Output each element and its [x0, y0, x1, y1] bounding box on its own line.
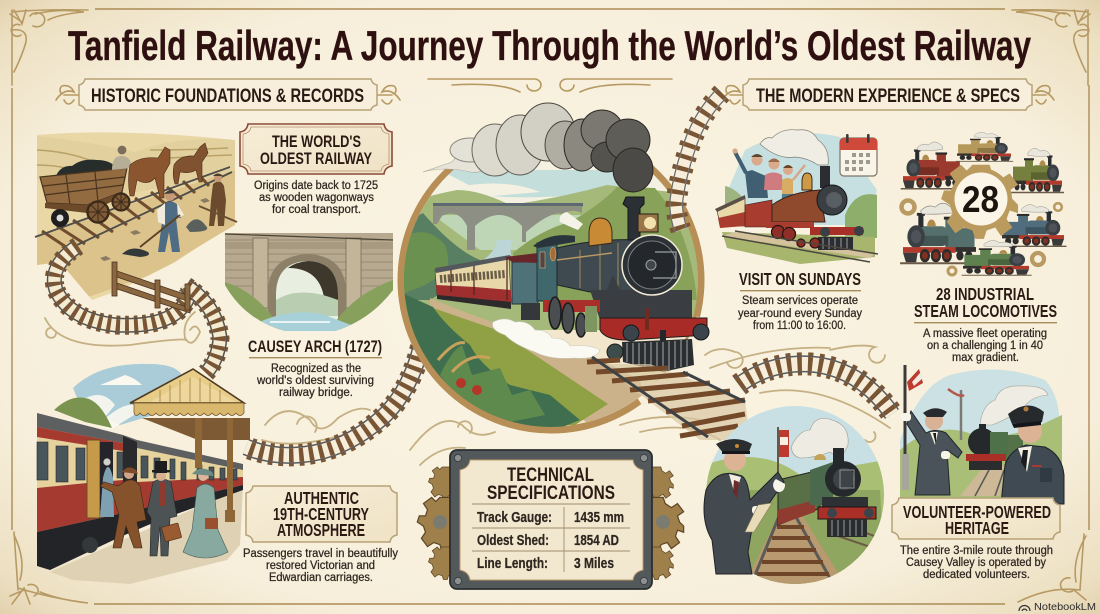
straight wooden track	[35, 167, 232, 253]
distant hills	[400, 185, 700, 330]
railway carriage	[37, 427, 243, 532]
red locomotive	[901, 142, 962, 189]
text: Causey Arch description: world's oldest surviving	[256, 375, 374, 387]
trees left	[404, 232, 448, 293]
illustration: fleet of 28 locomotives	[900, 132, 1066, 275]
boiler	[557, 240, 645, 292]
wagon wheels	[51, 209, 69, 227]
text: world's oldest railway description: for coal transport.	[272, 204, 361, 216]
hills	[725, 186, 745, 225]
dome	[589, 218, 612, 246]
gears	[417, 467, 684, 580]
small gears	[902, 200, 1062, 275]
text: locomotives description: A massive fleet operating	[923, 328, 1047, 340]
carriage windows	[37, 442, 237, 482]
white steam	[492, 319, 600, 358]
table rows: 3 Miles	[574, 556, 614, 572]
technical specifications panel: SPECIFICATIONS	[487, 483, 615, 504]
plaque: authentic atmosphere	[246, 486, 397, 542]
illustration: Causey Arch bridge	[225, 233, 393, 333]
heading banner: modern experience: THE MODERN EXPERIENCE & SPECS	[756, 85, 1020, 107]
break in ring at lower right	[640, 318, 702, 402]
tender	[512, 262, 538, 304]
heading banner: modern experience	[722, 79, 1054, 110]
table rows: 1435 mm	[574, 510, 624, 526]
lamp	[638, 214, 658, 232]
text: visit on Sundays description: year-round every Sunday	[738, 308, 862, 320]
carriage	[717, 197, 745, 226]
signal post and arm	[904, 365, 906, 489]
horse one	[128, 147, 170, 198]
viaduct	[433, 203, 583, 250]
track curving down from medallion	[246, 347, 421, 455]
table rows	[477, 510, 624, 572]
heading: visit on Sundays	[739, 269, 861, 291]
open door and passenger boarding	[87, 440, 100, 518]
carriages	[435, 257, 511, 302]
text: authentic atmosphere description: restored Victorian and	[266, 560, 375, 572]
passengers waving	[732, 148, 805, 217]
sky and hills	[900, 370, 1060, 500]
text: locomotives description	[923, 328, 1047, 364]
gold ring	[401, 130, 701, 430]
olive locomotive	[1011, 148, 1064, 192]
hills and dirt ground	[37, 130, 238, 305]
central gear with 28	[941, 165, 1018, 239]
train smoke	[760, 130, 828, 165]
plaque: world's oldest railway: OLDEST RAILWAY	[260, 150, 372, 168]
heading: 28 locomotives	[914, 284, 1057, 323]
valley hillsides	[400, 213, 480, 300]
text: world's oldest railway description: as wooden wagonways	[259, 192, 374, 204]
plaque: volunteer-powered heritage: HERITAGE	[945, 518, 1009, 538]
scene: horse-drawn coal wagon on wooden wagonway	[35, 130, 238, 305]
text: world's oldest railway description: Origins date back to 1725	[254, 180, 378, 192]
text: authentic atmosphere description: Edwardian carriages.	[269, 572, 373, 584]
guard in uniform	[704, 439, 785, 574]
flourishes near tracks	[45, 312, 890, 465]
corner ornament: bottom right	[1018, 534, 1086, 602]
corner ornament: bottom left	[10, 532, 88, 604]
canopy posts	[195, 418, 202, 468]
wooden wagon	[40, 168, 127, 205]
passenger in teal dress	[183, 484, 228, 558]
text: volunteer description: The entire 3-mile route through	[900, 545, 1053, 557]
text: Causey Arch description: railway bridge.	[279, 387, 353, 399]
heading: visit on Sundays: VISIT ON SUNDAYS	[739, 269, 861, 289]
wagon driver	[112, 156, 132, 170]
track in front of locomotive	[587, 357, 750, 440]
station canopy	[130, 369, 244, 403]
corner ornament: top right	[1012, 10, 1090, 85]
text: locomotives description: on a challenging 1 in 40	[927, 340, 1043, 352]
illustration: family riding steam train on Sunday	[715, 130, 878, 264]
trackbed and grass	[430, 298, 650, 430]
wooden fence	[112, 262, 190, 313]
flourish above central medallion	[428, 79, 672, 92]
green coach	[778, 470, 820, 525]
corner ornament: top left	[10, 10, 88, 85]
worker with shovel	[158, 202, 181, 252]
smoke plume	[423, 103, 653, 192]
curved track below wagon scene	[54, 246, 220, 373]
table rows: Track Gauge:	[477, 510, 552, 526]
volunteer one	[901, 408, 962, 495]
text: locomotives description: max gradient.	[952, 352, 1019, 364]
text: volunteer description: dedicated volunteers.	[923, 569, 1030, 581]
heading: Causey Arch	[248, 337, 382, 358]
passenger in top hat	[147, 479, 177, 556]
text: authentic atmosphere description	[243, 548, 398, 584]
passenger in brown suit	[100, 480, 146, 548]
central gear with 28: 28	[962, 179, 999, 220]
plaque: world's oldest railway: THE WORLD'S	[272, 133, 361, 151]
track top right of medallion	[676, 93, 722, 230]
foreground foliage	[400, 292, 580, 436]
green locomotive	[962, 240, 1032, 275]
illustration: volunteers beside signal	[900, 365, 1064, 504]
smoke	[792, 418, 848, 458]
grass and ground	[722, 232, 875, 264]
text: authentic atmosphere description: Passengers travel in beautifully	[243, 548, 398, 560]
flag	[777, 427, 779, 472]
platform	[50, 487, 243, 584]
icon: calendar	[840, 134, 877, 176]
watermark: NotebookLM: NotebookLM	[1034, 601, 1096, 613]
green-grey locomotive	[900, 203, 977, 263]
table rows: 1854 AD	[574, 533, 619, 549]
locomotive	[772, 190, 825, 222]
buffer beam	[600, 318, 707, 340]
plaque: authentic atmosphere: AUTHENTIC	[284, 488, 359, 508]
text: world's oldest railway description	[254, 180, 378, 216]
heading banner: historic foundations: HISTORIC FOUNDATIONS & RECORDS	[91, 85, 364, 107]
sky	[725, 133, 877, 225]
plaque: authentic atmosphere: 19TH-CENTURY	[273, 504, 369, 524]
text: volunteer description: Causey Valley is operated by	[906, 557, 1046, 569]
heading: 28 locomotives: 28 INDUSTRIAL	[936, 284, 1034, 304]
horse two	[173, 143, 208, 184]
table rows: Line Length:	[477, 556, 548, 572]
panel heading: TECHNICAL	[507, 465, 594, 486]
text: volunteer description	[900, 545, 1053, 581]
plaque: authentic atmosphere: ATMOSPHERE	[277, 520, 365, 540]
worker with pick	[209, 181, 226, 226]
table rows: Oldest Shed:	[477, 533, 549, 549]
technical specifications panel	[417, 450, 684, 589]
heading: Causey Arch: CAUSEY ARCH (1727)	[248, 337, 382, 356]
paper beyond buffer	[684, 320, 712, 400]
table rules	[472, 504, 630, 572]
text: visit on Sundays description: from 11:00 to 16:00.	[753, 320, 846, 332]
smokebox	[622, 235, 682, 295]
plaque: world's oldest railway	[240, 124, 392, 174]
text: Causey Arch description: Recognized as the	[271, 363, 361, 375]
illustration: station platform with Victorian passengers	[37, 364, 250, 584]
text: visit on Sundays description	[738, 295, 862, 332]
distant green locomotive	[966, 424, 1023, 470]
text: Causey Arch description	[256, 363, 374, 399]
sky	[417, 160, 670, 220]
locomotive front	[833, 448, 844, 464]
steel frame	[450, 450, 652, 589]
frame and wheels	[590, 290, 692, 320]
sky and tree	[73, 364, 182, 425]
blue locomotive	[1001, 205, 1066, 246]
arched track right of centre	[739, 364, 892, 414]
coal heap	[55, 160, 122, 182]
central medallion: steam train in valley	[400, 103, 750, 440]
tan locomotive	[956, 132, 1013, 161]
cowcatcher	[622, 339, 694, 372]
chimney	[623, 197, 644, 240]
text: visit on Sundays description: Steam services operate	[742, 295, 858, 307]
illustration: guard with flag and oncoming train	[700, 405, 890, 590]
cab	[537, 243, 557, 301]
plaque: volunteer-powered heritage	[892, 498, 1060, 539]
parchment inset	[460, 460, 643, 580]
steam	[980, 386, 1048, 425]
undercarriage	[37, 485, 243, 570]
heading banner: historic foundations	[56, 79, 400, 110]
volunteer two	[1001, 405, 1064, 504]
